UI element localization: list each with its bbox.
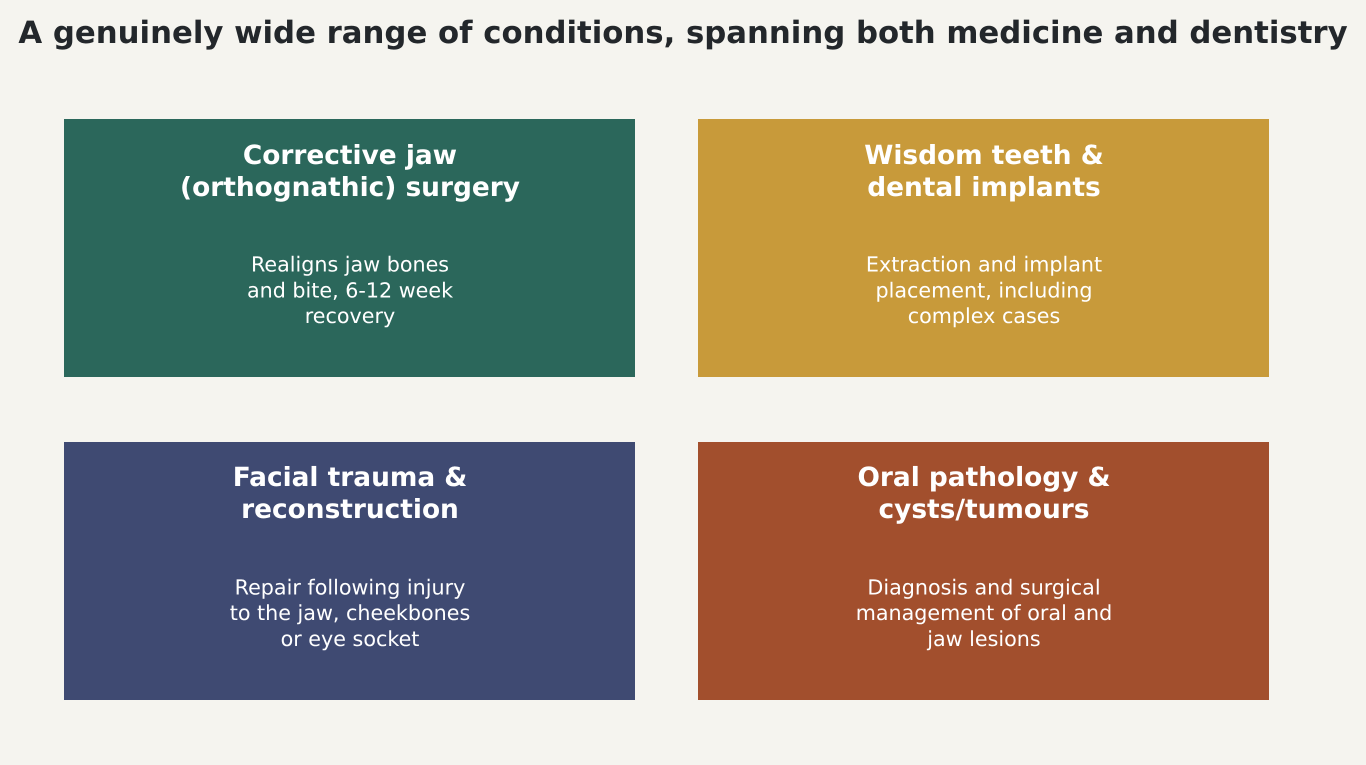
text: wisdom teeth description: placement, including	[876, 278, 1092, 302]
text: facial trauma description: Repair following injury	[235, 575, 465, 599]
panel: oral pathology and cysts/tumours	[698, 442, 1269, 700]
text: facial trauma description: or eye socket	[281, 627, 419, 651]
heading: wisdom teeth and dental implants: Wisdom teeth &	[864, 141, 1104, 171]
panel: facial trauma and reconstruction	[64, 442, 635, 700]
heading: facial trauma and reconstruction: Facial trauma &	[233, 463, 467, 493]
text: oral pathology description: management of oral and	[856, 601, 1112, 625]
text: oral pathology description: jaw lesions	[926, 627, 1041, 651]
heading: corrective jaw surgery: (orthognathic) surgery	[180, 173, 520, 203]
text: corrective jaw surgery description: recovery	[305, 304, 395, 328]
heading: facial trauma and reconstruction: reconstruction	[241, 495, 459, 525]
heading: oral pathology and cysts/tumours: cysts/tumours	[879, 495, 1089, 525]
heading: wisdom teeth and dental implants: dental implants	[867, 173, 1101, 203]
text: oral pathology description: Diagnosis and surgical	[867, 575, 1101, 599]
text: facial trauma description: to the jaw, cheekbones	[230, 601, 470, 625]
panel: corrective jaw surgery	[64, 119, 635, 377]
text: corrective jaw surgery description: Realigns jaw bones	[251, 253, 449, 277]
heading: corrective jaw surgery: Corrective jaw	[243, 141, 457, 171]
text: wisdom teeth description: complex cases	[908, 304, 1060, 328]
panel: wisdom teeth and dental implants	[698, 119, 1269, 377]
text: wisdom teeth description: Extraction and implant	[866, 253, 1102, 277]
text: corrective jaw surgery description: and bite, 6-12 week	[247, 278, 453, 302]
title: A genuinely wide range of conditions, spanning both medicine and dentistry	[18, 15, 1348, 51]
heading: oral pathology and cysts/tumours: Oral pathology &	[857, 463, 1111, 493]
